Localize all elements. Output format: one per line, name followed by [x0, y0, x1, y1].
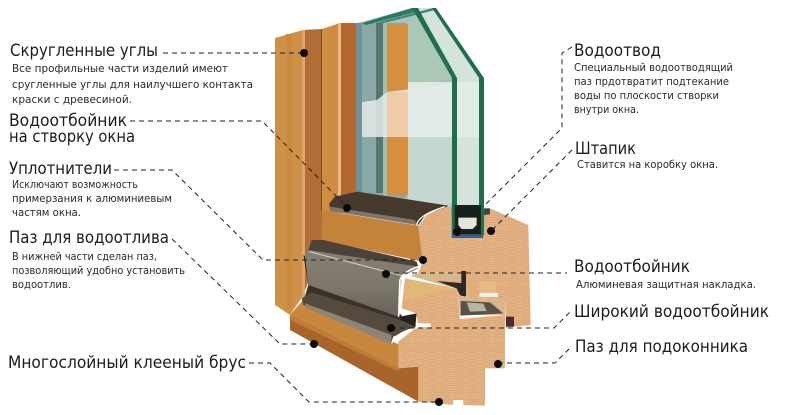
hardware cavity: [400, 271, 514, 328]
label: sash drip: [9, 111, 135, 147]
label: rounded corners: Все профильные части изделий имеют: [12, 63, 228, 75]
label: flashing groove: Паз для водоотлива: [9, 228, 169, 248]
sash lower wood section: [398, 278, 505, 406]
label: rounded corners: сругленные углы для наилучшего контакта: [12, 79, 253, 91]
wooden frame front faces: [275, 23, 400, 370]
sash wood face: [322, 210, 423, 262]
label: water drain: паз прдотвратит подтекание: [574, 76, 729, 88]
label: water drain: воды по плоскости створки: [574, 90, 719, 102]
large aluminium drip: [305, 240, 418, 317]
marker dots: [300, 49, 502, 406]
label: sash drip: на створку окна: [9, 127, 135, 147]
shadow behind aluminium drip: [303, 255, 402, 322]
window cross-section illustration: [275, 8, 531, 406]
label: sash drip: Водоотбойник: [9, 111, 127, 131]
sash aluminium cap: [329, 192, 448, 225]
label: seals: [9, 159, 172, 219]
label: rounded corners: [10, 41, 253, 106]
glass unit: [356, 8, 484, 215]
leader lines: [114, 47, 572, 402]
label: laminated timber: Многослойный клееный брус: [8, 353, 246, 373]
label: glazing bead: Ставится на коробку окна.: [577, 159, 718, 171]
label: seals: Исключают возможность: [12, 179, 138, 191]
window section in zoomed coordinates: [290, 192, 531, 406]
glazing seal: [452, 203, 490, 238]
lower sash face: [290, 307, 398, 368]
label: drip: Водоотбойник: [574, 257, 690, 277]
label: water drain: Водоотвод: [574, 41, 661, 61]
label: flashing groove: водоотлив.: [12, 279, 71, 291]
label: water drain: [574, 41, 733, 116]
label: sill groove: Паз для подоконника: [575, 337, 748, 357]
label: flashing groove: В нижней части сделан паз,: [12, 251, 157, 263]
label: drip: Алюминевая защитная накладка.: [576, 279, 756, 291]
sill rail: [290, 315, 418, 402]
lower aluminium drip: [302, 292, 415, 344]
label: wide drip: Широкий водоотбойник: [574, 302, 769, 322]
label: flashing groove: позволяющий удобно установить: [12, 265, 185, 277]
label: glazing bead: Штапик: [575, 139, 636, 159]
frame wood section: [418, 207, 531, 328]
label: seals: частям окна.: [12, 207, 81, 219]
label: drip: [574, 257, 756, 291]
label: water drain: Специальный водоотводящий: [574, 62, 733, 74]
label: rounded corners: Скругленные углы: [10, 41, 158, 61]
label: glazing bead: [575, 139, 718, 171]
label: water drain: внутри окна.: [574, 104, 639, 116]
label: rounded corners: краски с древесиной.: [12, 94, 132, 106]
label: flashing groove: [9, 228, 185, 291]
label: seals: Уплотнители: [9, 159, 112, 179]
label: seals: примерзания к алюминиевым: [12, 193, 172, 205]
